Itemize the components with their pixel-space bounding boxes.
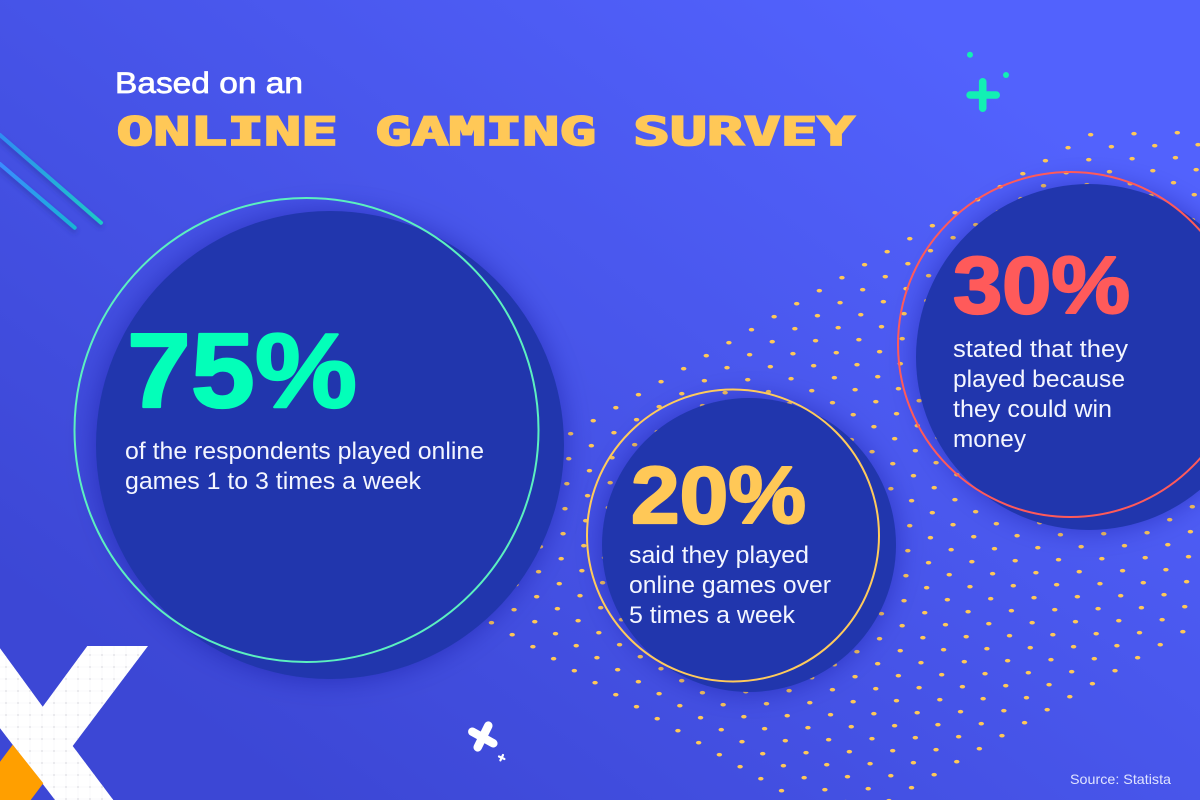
icon: small white crosses xyxy=(472,726,504,760)
icon: large white X with orange corner xyxy=(0,646,148,800)
title xyxy=(115,67,855,155)
source note: Source: Statista xyxy=(1070,771,1171,787)
stat: 75%: 75% xyxy=(127,312,357,430)
text: 20% description: said they played xyxy=(629,542,809,569)
text: 75% description xyxy=(125,438,484,495)
panel: 75% circle xyxy=(74,198,564,679)
stat: 20%: 20% xyxy=(631,451,806,541)
text: 30% description: stated that they xyxy=(953,336,1128,363)
text: 75% description: games 1 to 3 times a week xyxy=(125,468,422,495)
text: 20% description xyxy=(629,542,831,629)
text: 20% description: 5 times a week xyxy=(629,602,796,629)
text: 20% description: online games over xyxy=(629,572,831,599)
dotted pattern field xyxy=(488,130,1200,800)
icon: neon diagonal lines xyxy=(0,135,102,232)
title line: Based on an: Based on an xyxy=(115,67,303,100)
title line: Online Gaming Survey: ONLINE GAMING SURVEY xyxy=(116,110,855,155)
stat: 30%: 30% xyxy=(953,241,1130,331)
text: 75% description: of the respondents played online xyxy=(125,438,484,465)
text: 30% description: played because xyxy=(953,366,1125,393)
panel: 30% circle xyxy=(898,172,1200,530)
text: 30% description: they could win xyxy=(953,396,1112,423)
icon: green plus with dots xyxy=(966,52,1009,112)
text: 30% description xyxy=(953,336,1128,453)
panel: 20% circle xyxy=(587,390,896,692)
text: 30% description: money xyxy=(953,426,1026,453)
